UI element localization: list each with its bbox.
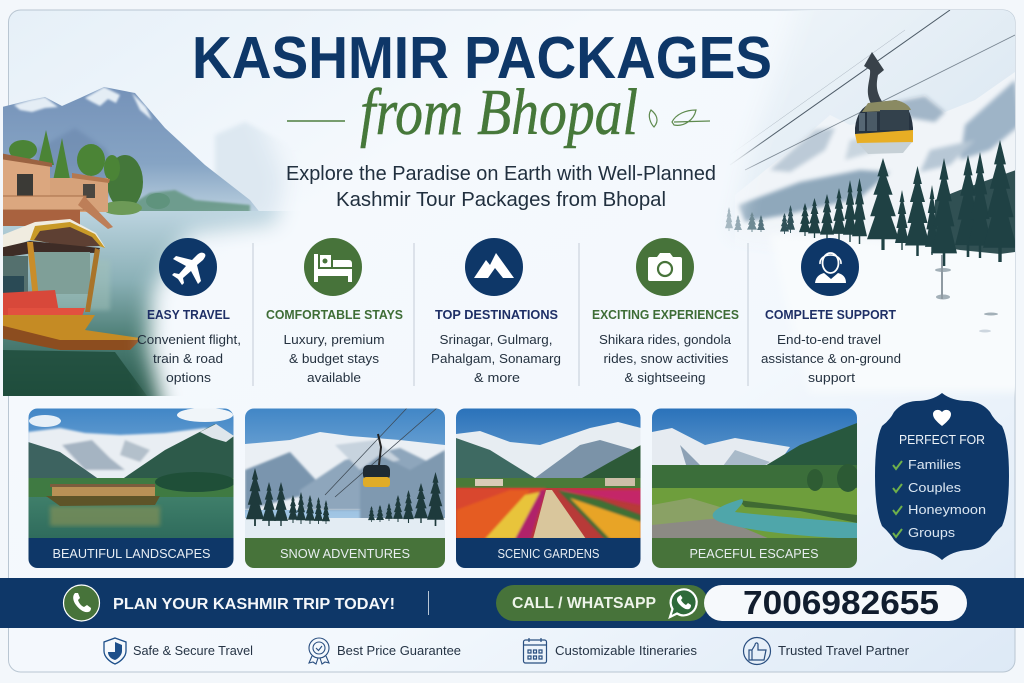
card: beautiful landscapes xyxy=(28,408,235,569)
trust row: Trusted Travel Partner xyxy=(778,644,909,658)
feature: complete support xyxy=(761,238,901,385)
lake water xyxy=(3,211,286,396)
icon: support agent xyxy=(801,238,859,296)
icon: calendar xyxy=(524,638,546,663)
far shore trees xyxy=(130,190,250,213)
heading: COMPLETE SUPPORT xyxy=(765,307,896,322)
call to action band xyxy=(0,578,1024,628)
trust row: Customizable Itineraries xyxy=(555,644,697,658)
body text: Luxury, premium xyxy=(284,332,384,347)
icon: ribbon xyxy=(309,638,329,664)
gondola xyxy=(325,408,437,497)
heading: TOP DESTINATIONS xyxy=(435,307,558,322)
body text xyxy=(284,332,384,385)
icon: heart xyxy=(933,410,951,426)
card: snow adventures xyxy=(245,408,445,569)
checklist: Couples xyxy=(908,480,962,495)
snowy mountains xyxy=(738,72,1015,242)
distant hazy mountain xyxy=(214,122,286,211)
feature: top destinations xyxy=(431,238,561,385)
label bar xyxy=(28,538,234,569)
heading: COMFORTABLE STAYS xyxy=(266,307,403,322)
body text: Convenient flight, xyxy=(137,332,241,347)
call to action band: PLAN YOUR KASHMIR TRIP TODAY! xyxy=(113,596,395,613)
icon: phone xyxy=(64,585,100,621)
icon: airplane xyxy=(159,238,217,296)
label bar xyxy=(456,538,641,569)
icon: bed xyxy=(304,238,362,296)
body text: & sightseeing xyxy=(624,370,706,385)
body text: Shikara rides, gondola xyxy=(599,332,732,347)
body text: rides, snow activities xyxy=(604,351,729,366)
trust row xyxy=(104,638,909,664)
conifer forest xyxy=(725,140,1024,266)
card: beautiful landscapes: BEAUTIFUL LANDSCAPES xyxy=(52,547,211,561)
body text: options xyxy=(166,370,212,385)
body text: support xyxy=(808,370,855,385)
card: peaceful escapes xyxy=(652,408,859,569)
snow mountain range xyxy=(0,87,262,215)
icon: whatsapp xyxy=(670,589,697,617)
label bar xyxy=(245,538,445,569)
icon: mountains xyxy=(465,238,523,296)
icon: camera xyxy=(636,238,694,296)
icon: shield xyxy=(104,638,126,664)
tagline: Explore the Paradise on Earth with Well-Planned xyxy=(286,162,716,185)
card: peaceful escapes: PEACEFUL ESCAPES xyxy=(690,547,818,561)
feature: easy travel xyxy=(137,238,241,385)
body text: available xyxy=(307,370,361,385)
heading: EXCITING EXPERIENCES xyxy=(592,307,739,322)
tagline: Kashmir Tour Packages from Bhopal xyxy=(336,188,666,211)
photo: Gulmarg snow slope with gondola xyxy=(725,10,1015,396)
card: scenic gardens: SCENIC GARDENS xyxy=(498,547,600,561)
subtitle script: from Bhopal: from Bhopal xyxy=(360,76,638,149)
gondola cabin xyxy=(855,52,913,154)
body text: & budget stays xyxy=(289,351,380,366)
body text: Srinagar, Gulmarg, xyxy=(440,332,552,347)
feature: comfortable stays xyxy=(266,238,403,385)
checklist: Honeymoon xyxy=(908,502,986,517)
body text xyxy=(137,332,241,385)
body text xyxy=(599,332,732,385)
houseboat xyxy=(46,484,160,506)
call to action band: CALL / WHATSAPP xyxy=(512,595,656,612)
body text: End-to-end travel xyxy=(777,332,881,347)
badge: perfect for xyxy=(875,393,1009,560)
green trees xyxy=(9,130,170,215)
houseboat xyxy=(0,153,113,229)
scalloped shape xyxy=(875,393,1009,560)
path xyxy=(533,490,586,539)
boat reflection xyxy=(3,350,147,396)
title: KASHMIR PACKAGES xyxy=(192,25,772,91)
body text: assistance & on-ground xyxy=(761,351,901,366)
body text: Pahalgam, Sonamarg xyxy=(431,351,561,366)
phone number pill xyxy=(704,585,967,621)
body text xyxy=(761,332,901,385)
checklist xyxy=(893,457,986,540)
trust row: Safe & Secure Travel xyxy=(133,644,253,658)
trust row: Best Price Guarantee xyxy=(337,644,461,658)
call to action band: 7006982655 xyxy=(743,584,939,621)
cables xyxy=(730,10,1015,170)
river xyxy=(713,499,857,539)
green pill xyxy=(496,585,708,621)
body text xyxy=(431,332,561,385)
icon: thumbs up xyxy=(744,638,770,664)
shikara boat xyxy=(0,219,140,350)
badge: perfect for: PERFECT FOR xyxy=(899,433,985,447)
photo: Dal Lake with houseboat and shikara xyxy=(3,87,288,396)
label bar xyxy=(652,538,857,569)
snow foreground xyxy=(844,278,1015,396)
card: snow adventures: SNOW ADVENTURES xyxy=(280,547,410,561)
checklist: Families xyxy=(908,457,962,472)
card: scenic gardens xyxy=(456,408,641,569)
feature: exciting experiences xyxy=(592,238,739,385)
tagline xyxy=(286,162,716,211)
body text: train & road xyxy=(153,351,223,366)
heading: EASY TRAVEL xyxy=(147,307,230,322)
body text: & more xyxy=(474,370,520,385)
checklist: Groups xyxy=(908,525,956,540)
leaf ornaments xyxy=(649,110,710,127)
